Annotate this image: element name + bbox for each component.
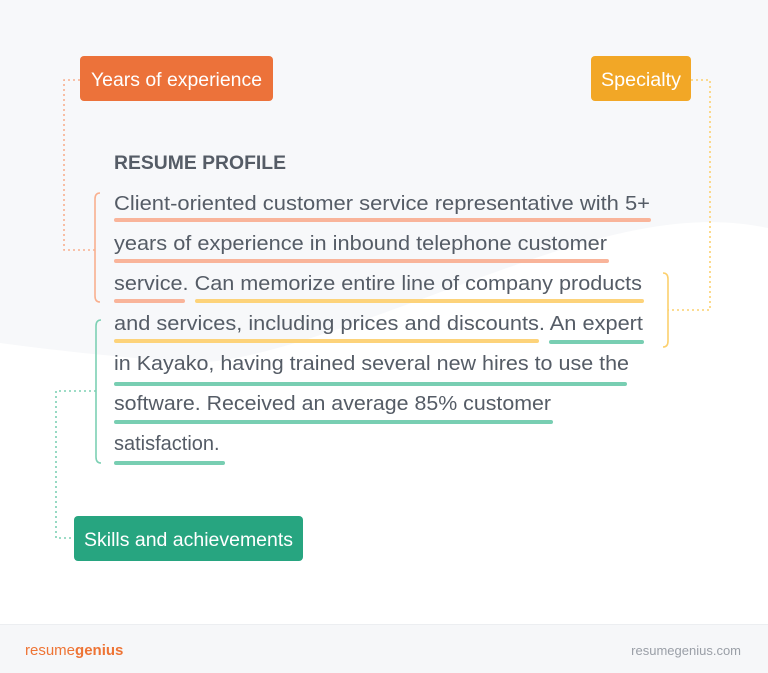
footer <box>0 624 768 673</box>
bracket: years of experience <box>95 193 100 302</box>
bracket: skills <box>96 320 101 463</box>
heading: RESUME PROFILE <box>114 153 286 174</box>
profile text: Client-oriented customer service representative with 5+ <box>114 193 650 215</box>
profile text: service. Can memorize entire line of company products <box>114 273 642 295</box>
profile text: satisfaction. <box>114 433 220 455</box>
connector: years of experience <box>64 80 95 250</box>
bracket: specialty <box>663 273 668 347</box>
connector: specialty <box>668 80 710 310</box>
label: years of experience <box>80 56 273 101</box>
profile text: in Kayako, having trained several new hires to use the <box>114 353 629 375</box>
profile text: years of experience in inbound telephone customer <box>114 233 607 255</box>
label: years of experience: Years of experience <box>91 70 262 91</box>
footer: resumegenius.com <box>631 643 741 658</box>
footer: resumegenius <box>25 642 123 659</box>
label: skills and achievements <box>74 516 303 561</box>
connector: skills <box>56 391 96 538</box>
underlines <box>116 220 649 463</box>
label: specialty <box>591 56 691 101</box>
profile text: and services, including prices and discounts. An expert <box>114 313 643 335</box>
profile text <box>114 193 650 455</box>
label: specialty: Specialty <box>601 70 682 91</box>
label: skills and achievements: Skills and achievements <box>84 530 293 551</box>
profile text: software. Received an average 85% customer <box>114 393 551 415</box>
